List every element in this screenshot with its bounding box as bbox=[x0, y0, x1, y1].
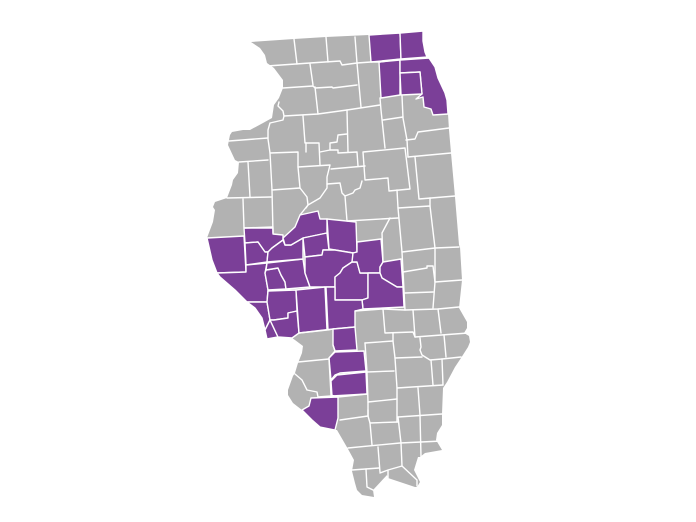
state outline: gray counties bbox=[207, 31, 470, 497]
highlighted counties bbox=[207, 31, 448, 430]
central counties bbox=[296, 239, 404, 351]
county borders bbox=[227, 37, 468, 490]
Chicago-area counties bbox=[369, 31, 448, 115]
west-central counties bbox=[207, 211, 357, 339]
southern counties bbox=[302, 351, 367, 430]
